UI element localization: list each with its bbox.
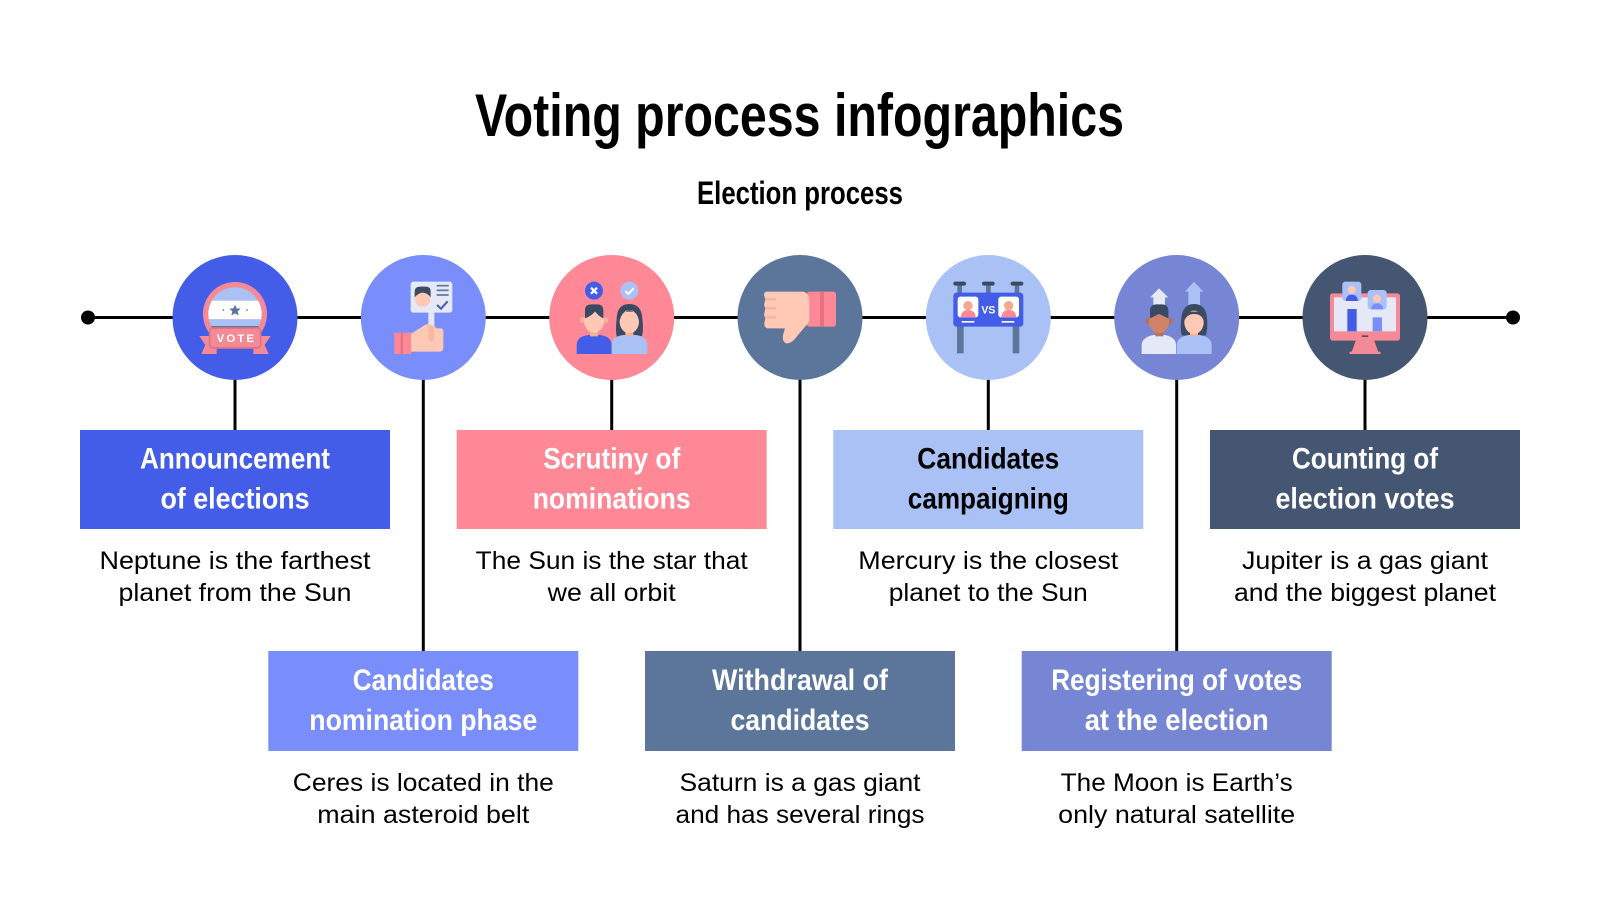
- description: Sun: [476, 547, 748, 607]
- description: Sun: we all orbit: [547, 579, 676, 607]
- box: withdrawal of candidates: Withdrawal of: [712, 664, 889, 697]
- box: candidates campaigning: [833, 430, 1143, 529]
- box: scrutiny of nominations: nominations: [533, 482, 691, 516]
- description: Mercury: Mercury is the closest: [858, 547, 1118, 575]
- description: Jupiter: and the biggest planet: [1234, 579, 1496, 607]
- box: counting of election votes: election votes: [1276, 482, 1454, 516]
- description: Mercury: planet to the Sun: [889, 579, 1088, 607]
- step 7: counting of election votes: [1210, 255, 1520, 607]
- icon: versus billboard: [926, 255, 1051, 380]
- description: Ceres: main asteroid belt: [317, 801, 529, 829]
- description: Moon: [1058, 769, 1295, 829]
- step 3: scrutiny of nominations: [457, 255, 767, 607]
- box: registering of votes: [1022, 651, 1332, 751]
- box: registering of votes: at the election: [1085, 704, 1269, 737]
- box: registering of votes: Registering of votes: [1051, 664, 1302, 697]
- description: Jupiter: [1234, 547, 1496, 607]
- description: Sun: The Sun is the star that: [476, 547, 748, 575]
- icon: thumbs down: [738, 255, 862, 380]
- box: candidates campaigning: Candidates: [917, 442, 1059, 476]
- box: withdrawal of candidates: [645, 651, 955, 751]
- description: Saturn: [676, 769, 924, 829]
- description: Moon: only natural satellite: [1058, 801, 1295, 829]
- box: announcement: Announcement: [140, 442, 330, 476]
- timeline line: [81, 310, 1520, 652]
- description: Moon: The Moon is Earth’s: [1061, 769, 1293, 797]
- description: Neptune: Neptune is the farthest: [100, 547, 371, 575]
- box: counting of election votes: [1210, 430, 1520, 529]
- box: withdrawal of candidates: candidates: [730, 704, 870, 737]
- box: counting of election votes: Counting of: [1292, 442, 1439, 476]
- title: Voting process infographics: [475, 82, 1124, 149]
- box: candidates campaigning: campaigning: [908, 482, 1069, 516]
- step 1: announcement of elections: [80, 255, 390, 607]
- icon: vote badge: [172, 255, 298, 380]
- step 2: candidates nomination phase: [268, 255, 578, 829]
- description: Ceres: Ceres is located in the: [293, 769, 554, 797]
- description: Saturn: Saturn is a gas giant: [680, 769, 921, 797]
- box: candidates nomination phase: nomination phase: [309, 704, 537, 737]
- description: Ceres: [293, 769, 554, 829]
- description: Neptune: planet from the Sun: [118, 579, 352, 607]
- icon: voters with up arrows: [1114, 255, 1239, 380]
- subtitle: Election process: [697, 175, 903, 211]
- description: Mercury: [858, 547, 1118, 607]
- icon: two candidates with cross and check: [549, 255, 674, 380]
- box: scrutiny of nominations: Scrutiny of: [543, 442, 681, 476]
- box: candidates nomination phase: Candidates: [353, 664, 494, 697]
- box: candidates nomination phase: [268, 651, 578, 751]
- step 5: candidates campaigning: [833, 255, 1143, 607]
- description: Neptune: [100, 547, 371, 607]
- icon: hand holding candidate sign: [361, 255, 486, 380]
- step 6: registering of votes: [1022, 255, 1332, 829]
- description: Saturn: and has several rings: [676, 801, 924, 829]
- box: announcement: of elections: [160, 482, 310, 516]
- box: announcement: [80, 430, 390, 529]
- icon: vote badge: VOTE: [217, 333, 254, 345]
- description: Jupiter: Jupiter is a gas giant: [1242, 547, 1488, 575]
- icon: monitor with vote bars: [1302, 255, 1428, 380]
- step 4: withdrawal of candidates: [645, 255, 955, 829]
- icon: versus billboard: VS: [981, 305, 996, 317]
- box: scrutiny of nominations: [457, 430, 767, 529]
